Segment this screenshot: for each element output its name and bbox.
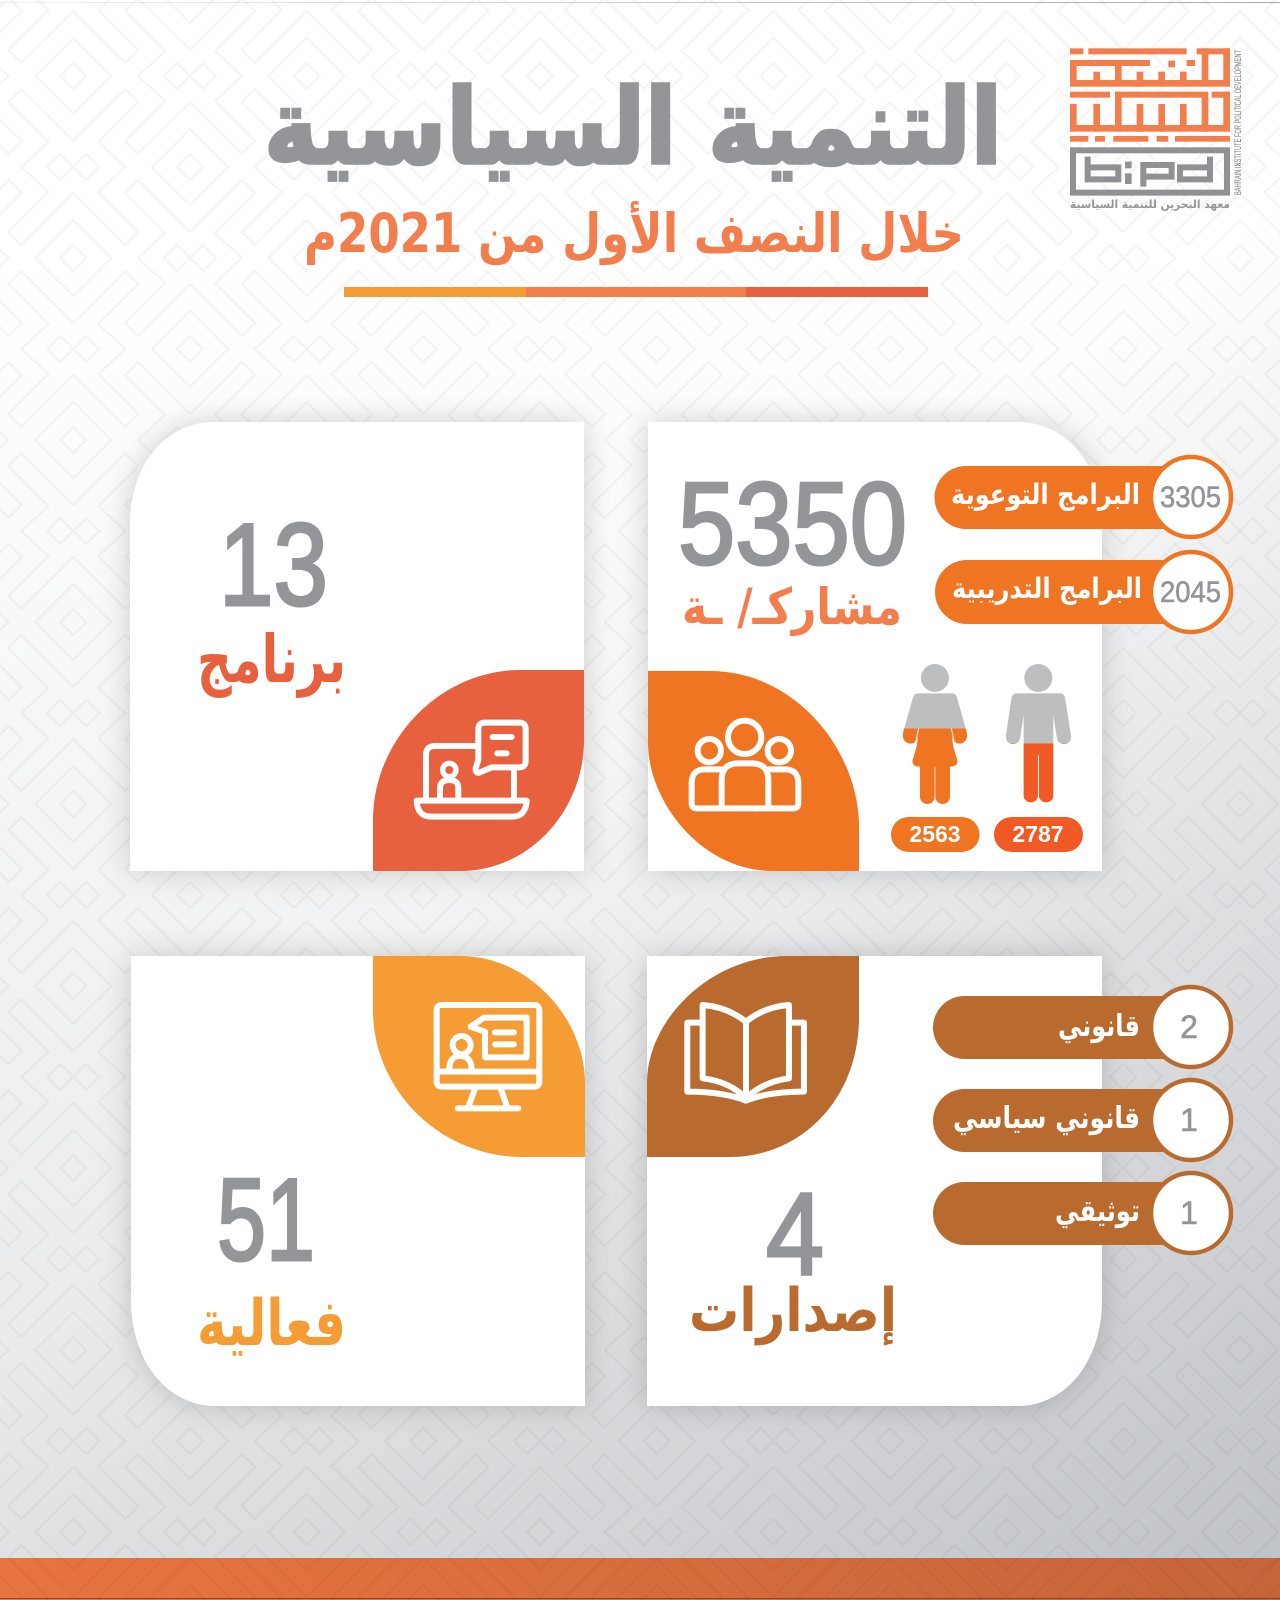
panel: events (131, 956, 585, 1406)
pill: legal: 2 (1180, 1009, 1198, 1045)
card background (131, 956, 585, 1406)
pill: legal political (933, 1080, 1231, 1160)
badge: men count: 2787 (1012, 821, 1064, 847)
badge: women count (891, 817, 980, 852)
card background (647, 956, 1102, 1406)
pill: training programmes: البرامج التدريبية (952, 572, 1142, 605)
pill: awareness programmes (935, 457, 1231, 537)
label programme: برنامج (197, 621, 346, 698)
pill: training programmes: 2045 (1160, 576, 1221, 609)
orange leaf (648, 671, 859, 871)
pill: awareness programmes: 3305 (1160, 481, 1221, 514)
pill: legal political: 1 (1180, 1102, 1198, 1138)
title underline (344, 287, 928, 297)
pill: legal political: قانوني سياسي (953, 1101, 1140, 1136)
pill: documentary: 1 (1180, 1195, 1198, 1231)
pill: legal: قانوني (1058, 1009, 1140, 1044)
panel: publications (647, 956, 1231, 1406)
panel: programmes (130, 422, 584, 871)
figure: men (1006, 664, 1071, 802)
subtitle: خلال النصف الأول من 2021م (304, 201, 964, 265)
number 13: 13 (219, 499, 328, 630)
panel: participants (648, 422, 1231, 871)
logo kufic orange wordmark (1070, 48, 1230, 142)
badge: women count: 2563 (909, 821, 961, 847)
card background (130, 422, 584, 871)
icon: open book (687, 1005, 804, 1101)
card background (648, 422, 1102, 871)
label events: فعالية (197, 1287, 346, 1361)
badge: men count (994, 817, 1083, 852)
pill: documentary (933, 1173, 1231, 1253)
pill: training programmes (935, 552, 1231, 632)
brown leaf (647, 956, 859, 1157)
label publications: إصدارات (689, 1276, 897, 1346)
number 51: 51 (217, 1154, 315, 1285)
figure: women (903, 664, 967, 804)
logo bipd gray monogram (1073, 150, 1227, 193)
icon: monitor with presenter (437, 1005, 539, 1108)
number 4: 4 (766, 1168, 824, 1299)
red leaf (373, 670, 584, 871)
icon: laptop with speech bubble (417, 723, 527, 817)
logo: Bahrain Institute for Political Development (1070, 48, 1243, 211)
pill: awareness programmes: البرامج التوعوية (951, 478, 1140, 511)
number 5350: 5350 (678, 458, 907, 589)
yellow leaf (373, 956, 585, 1157)
title: التنمية السياسية (264, 66, 1002, 188)
pill: legal (933, 987, 1231, 1067)
pill: documentary: توثيقي (1055, 1194, 1140, 1229)
label participants: مشاركـ/ ـة (682, 578, 902, 636)
logo Arabic caption: معهد البحرين للتنمية السياسية (1070, 197, 1230, 211)
icon: group of people (692, 721, 798, 808)
